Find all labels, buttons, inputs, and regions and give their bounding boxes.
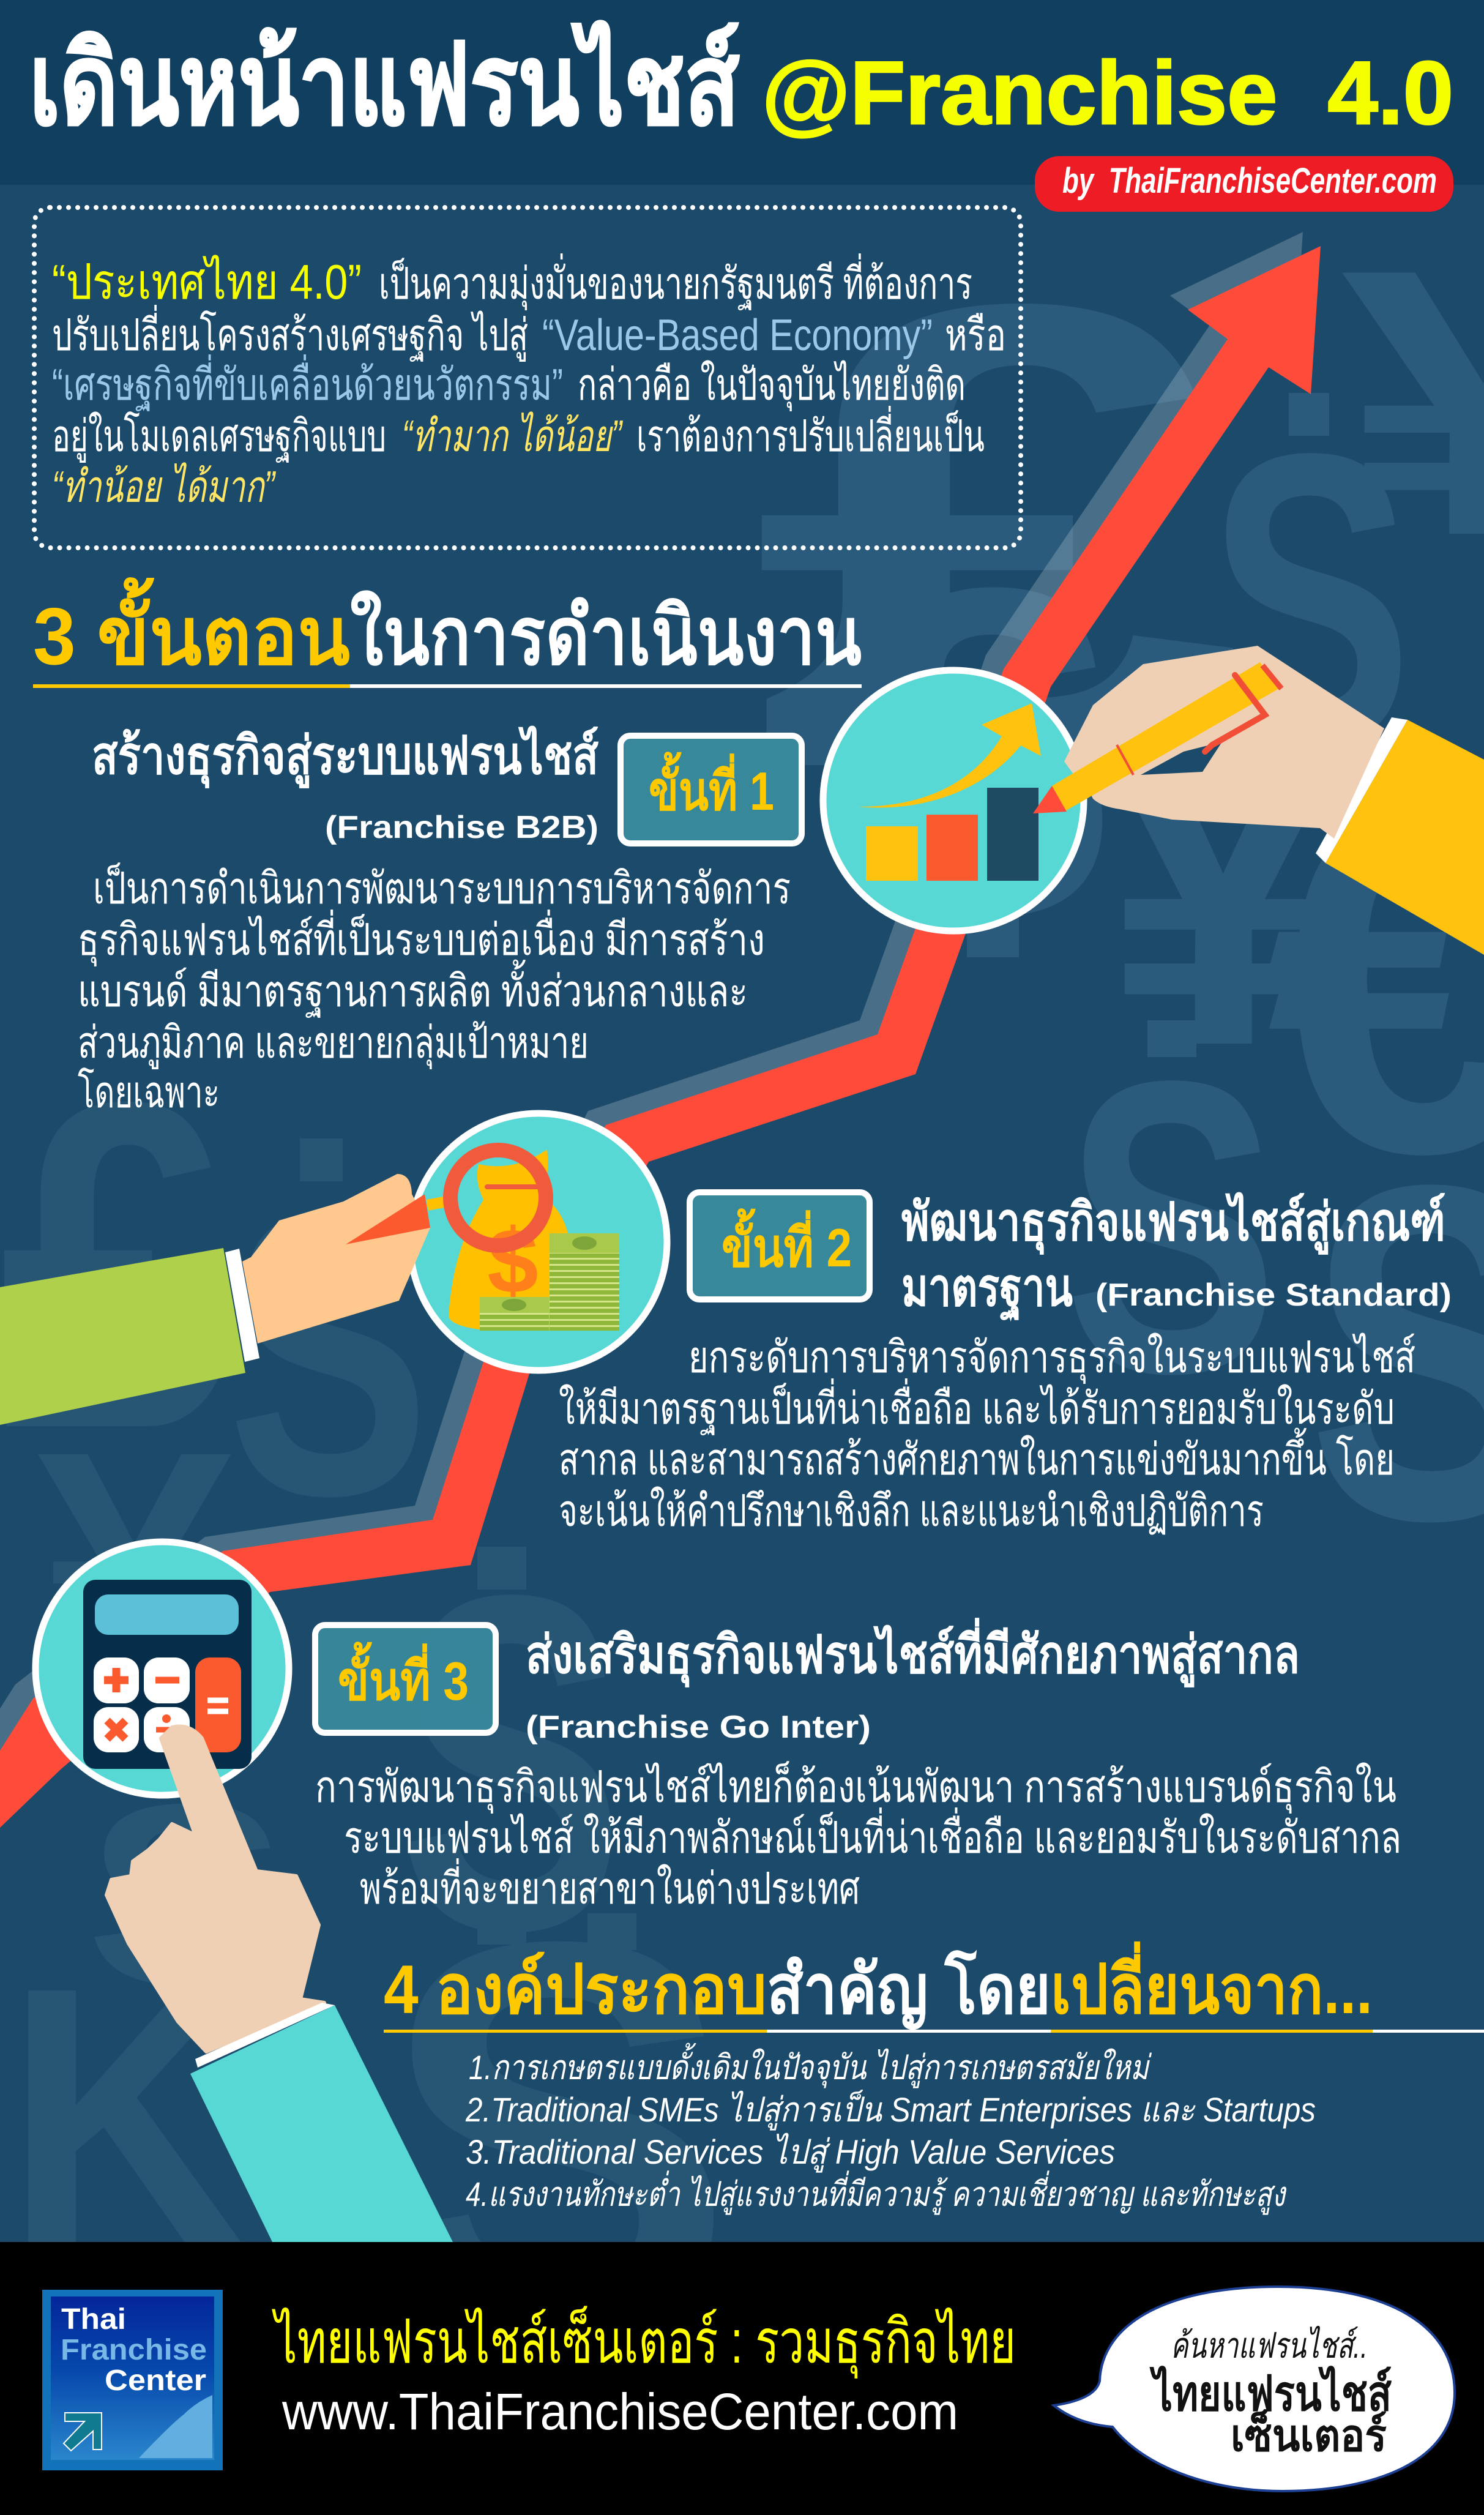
background currency symbols: S <box>379 1827 734 2443</box>
header band <box>0 0 1484 185</box>
footer tagline: ไทยแฟรนไชส์เซ็นเตอร์ : รวมธุรกิจไทย <box>272 2305 1016 2379</box>
hand 3 pointing <box>106 1726 453 2242</box>
title: เดินหน้าแฟรนไชส์ <box>29 21 740 148</box>
speech bubble: ค้นหาแฟรนไชส์.. <box>1171 2325 1368 2366</box>
background currency symbols: K <box>6 1911 245 2322</box>
step 1 title: (Franchise B2B) <box>325 810 598 845</box>
background currency symbols: ¥ <box>37 1388 235 1730</box>
step 3 text <box>315 1761 1401 1913</box>
title: @Franchise 4.0 <box>762 43 1453 143</box>
list of 4 components: 4.แรงงานทักษะต่ำ ไปสู่แรงงานที่มีความรู้ ความเชี่ยวชาญ และทักษะสูง <box>466 2170 1287 2215</box>
logo: Thai Franchise Center: Thai <box>61 2303 126 2336</box>
intro panel: dotted box: “Value-Based Economy” <box>542 311 933 360</box>
list of 4 components: 2.Traditional SMEs ไปสู่การเป็น Smart Enterprises และ Startups <box>465 2090 1316 2131</box>
step 2 badge: ขั้นที่ 2 <box>721 1208 852 1278</box>
intro panel: dotted box: “เศรษฐกิจที่ขับเคลื่อนด้วยนวัตกรรม” <box>52 354 563 411</box>
step 1 title: สร้างธุรกิจสู่ระบบแฟรนไชส์ <box>92 725 598 788</box>
circle 3: calculator icon <box>35 1542 289 1795</box>
intro panel: dotted box: หรือ <box>945 311 1006 360</box>
rising red arrow <box>0 232 1321 1828</box>
footer tagline: www.ThaiFranchiseCenter.com <box>282 2383 958 2440</box>
logo: Thai Franchise Center: Center <box>105 2364 206 2397</box>
background currency symbols: £ <box>0 1006 233 1525</box>
background currency symbols: S <box>1064 995 1278 1460</box>
heading: 4 components <box>384 1941 1484 2033</box>
hand 1 with pen <box>1033 646 1484 955</box>
intro panel: dotted box: อยู่ในโมเดลเศรษฐกิจแบบ <box>52 411 386 463</box>
heading: 4 components: 4 องค์ประกอบ <box>384 1951 767 2028</box>
badge: by ThaiFranchiseCenter.com <box>1035 156 1453 212</box>
step 1 text: ธุรกิจแฟรนไชส์ที่เป็นระบบต่อเนื่อง มีการสร้าง <box>78 910 765 966</box>
step 2 badge <box>690 1192 870 1299</box>
intro panel: dotted box: กล่าวคือ ในปัจจุบันไทยยังติด <box>578 360 966 411</box>
background currency symbols: S <box>869 491 1117 1011</box>
intro panel: dotted box: ปรับเปลี่ยนโครงสร้างเศรษฐกิจ ไปสู่ <box>52 305 528 362</box>
heading: 4 components: สำคัญ โดย <box>767 1950 1051 2030</box>
circle 1: bar chart icon <box>823 670 1084 931</box>
step 2 title <box>901 1192 1452 1322</box>
step 3 title: ส่งเสริมธุรกิจแฟรนไชส์ที่มีศักยภาพสู่สากล <box>526 1617 1300 1687</box>
background currency symbols: S <box>1207 367 1412 832</box>
logo: Thai Franchise Center <box>42 2290 223 2470</box>
step 1 text: โดยเฉพาะ <box>78 1067 220 1117</box>
heading: 3 steps <box>33 577 862 688</box>
hand 2 with magnifier <box>0 1150 546 1425</box>
heading: 3 steps: 3 ขั้นตอน <box>33 577 350 681</box>
circle 2: money bag icon <box>410 1113 667 1370</box>
step 3 title <box>526 1617 1300 1745</box>
footer tagline <box>272 2305 1016 2440</box>
step 1 title <box>92 725 598 845</box>
background currency symbols: £ <box>753 166 1242 905</box>
list of 4 components: 3.Traditional Services ไปสู่ High Value Services <box>466 2132 1115 2173</box>
circle 2: money bag icon: $ <box>487 1209 539 1312</box>
step 1 text: เป็นการดำเนินการพัฒนาระบบการบริหารจัดการ <box>93 862 791 913</box>
step 3 badge: ขั้นที่ 3 <box>338 1642 469 1711</box>
yellow sleeve <box>1326 720 1484 955</box>
heading: 4 components: เปลี่ยนจาก... <box>1051 1941 1373 2028</box>
step 1 text: แบรนด์ มีมาตรฐานการผลิต ทั้งส่วนกลางและ <box>78 959 748 1018</box>
intro panel: dotted box <box>34 207 1021 548</box>
intro panel: dotted box: เราต้องการปรับเปลี่ยนเป็น <box>636 406 985 461</box>
list of 4 components: 1.การเกษตรแบบดั้งเดิมในปัจจุบัน ไปสู่การเกษตรสมัยใหม่ <box>469 2042 1152 2088</box>
step 1 badge: ขั้นที่ 1 <box>649 752 774 821</box>
footer band <box>0 2242 1484 2515</box>
step 2 title: มาตรฐาน <box>901 1258 1073 1322</box>
intro panel: dotted box: “ทำน้อย ได้มาก” <box>52 462 276 512</box>
intro panel: dotted box: “ทำมาก ได้น้อย” <box>402 411 623 461</box>
step 1 text: ส่วนภูมิภาค และขยายกลุ่มเป้าหมาย <box>78 1018 589 1069</box>
speech bubble: ไทยแฟรนไชส์ <box>1149 2365 1392 2421</box>
heading: 3 steps: ในการดำเนินงาน <box>350 590 862 681</box>
background currency symbols: ¥ <box>1105 656 1346 1135</box>
list of 4 components <box>465 2042 1316 2215</box>
step 2 text <box>559 1332 1415 1536</box>
background currency symbols: S <box>398 1497 624 2030</box>
speech bubble <box>1054 2287 1455 2491</box>
intro panel: dotted box: เป็นความมุ่งมั่นของนายกรัฐมนตรี ที่ต้องการ <box>379 253 972 310</box>
step 3 text: พร้อมที่จะขยายสาขาในต่างประเทศ <box>360 1858 860 1913</box>
step 2 title: (Franchise Standard) <box>1095 1277 1452 1313</box>
speech bubble: เซ็นเตอร์ <box>1231 2409 1387 2461</box>
step 3 title: (Franchise Go Inter) <box>526 1710 871 1745</box>
step 3 badge <box>315 1625 496 1733</box>
green sleeve <box>0 1248 245 1425</box>
step 1 text <box>78 862 791 1117</box>
logo: Thai Franchise Center: Franchise <box>61 2334 207 2366</box>
intro panel: dotted box: “ประเทศไทย 4.0” <box>52 255 362 309</box>
title <box>29 21 1453 148</box>
background currency symbols: S <box>86 1751 288 2038</box>
background currency symbols: S <box>228 1128 430 1579</box>
step 1 badge <box>621 736 802 843</box>
background currency symbols <box>4 273 1484 2242</box>
